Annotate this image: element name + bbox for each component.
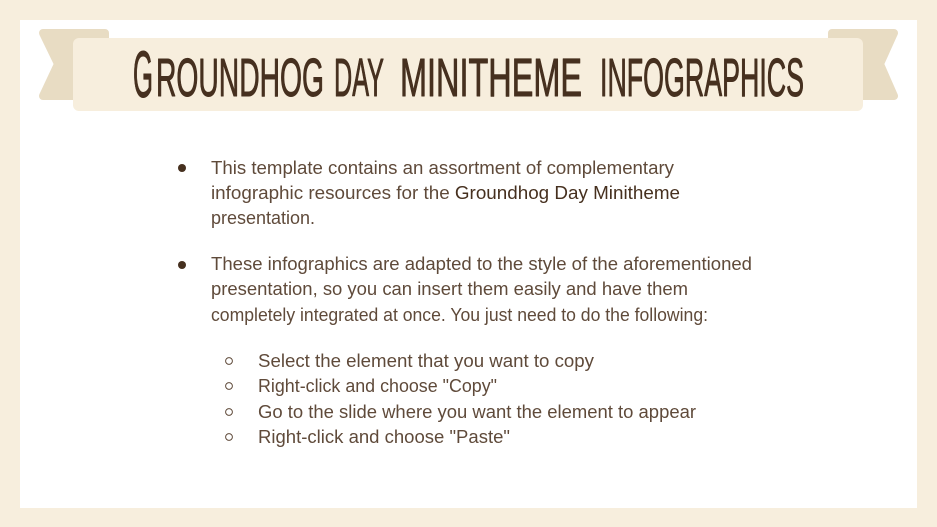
sub-list of steps bbox=[226, 351, 696, 447]
bullet text: These infographics are adapted to the style of the aforementioned bbox=[211, 254, 752, 274]
bullet text bbox=[211, 254, 752, 325]
right ribbon tail bbox=[832, 33, 894, 96]
bullet text: presentation, so you can insert them easily and have them bbox=[211, 279, 688, 299]
step 4: Right-click and choose "Paste" bbox=[258, 427, 510, 447]
title: G bbox=[133, 37, 153, 111]
step 2: Right-click and choose "Copy" bbox=[258, 376, 497, 396]
step 3: Go to the slide where you want the element to appear bbox=[258, 402, 696, 422]
banner body bbox=[73, 38, 863, 111]
step 1: Select the element that you want to copy bbox=[258, 351, 594, 371]
bullet text: This template contains an assortment of complementary bbox=[211, 158, 674, 178]
title: DAY bbox=[334, 48, 384, 108]
first bullet bbox=[178, 158, 680, 228]
title banner bbox=[43, 33, 894, 111]
title: ROUNDHOG bbox=[156, 48, 324, 108]
bullet text bbox=[211, 158, 680, 228]
bullet marker bbox=[178, 164, 186, 172]
left ribbon tail bbox=[43, 33, 105, 96]
bullet marker bbox=[178, 261, 186, 269]
second bullet bbox=[178, 254, 752, 325]
bullet text: presentation. bbox=[211, 208, 315, 228]
bullet text: completely integrated at once. You just need to do the following: bbox=[211, 305, 708, 325]
bullet text: infographic resources for the Groundhog Day Minitheme bbox=[211, 183, 680, 203]
title bbox=[133, 37, 804, 111]
title: MINITHEME bbox=[400, 48, 582, 108]
